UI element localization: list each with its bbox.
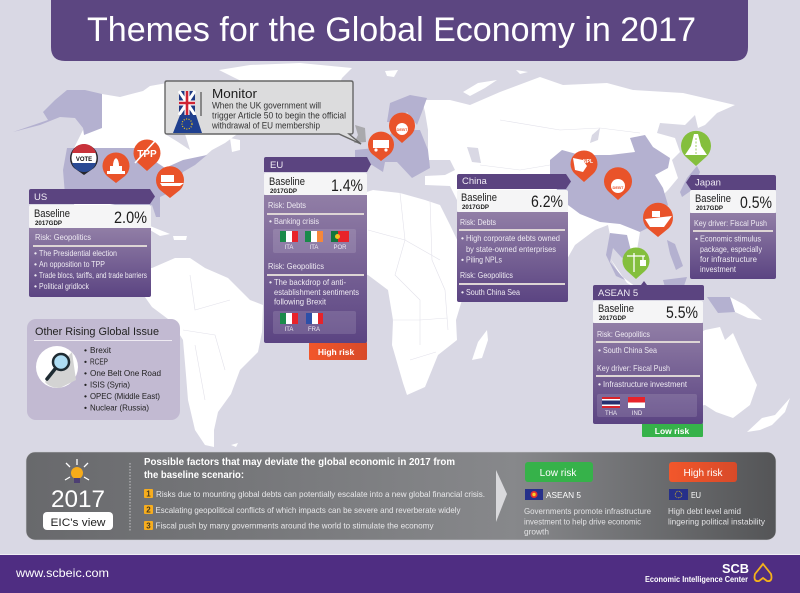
US risks: Risk: Geopolitics	[35, 232, 91, 242]
numbered factors: 2	[146, 506, 151, 514]
Japan key driver: Key driver: Fiscal Push	[694, 218, 767, 228]
title: Themes for the Global Economy in 2017	[87, 11, 696, 49]
panel: EU: establishment sentiments	[274, 287, 359, 297]
icon: magnifying glass	[36, 346, 78, 388]
panel: US: •	[34, 259, 37, 269]
China baseline	[457, 190, 568, 212]
EU risk: geopolitics: Risk: Geopolitics	[268, 261, 324, 271]
panel: US: •	[34, 270, 37, 280]
US header	[29, 189, 155, 204]
panel: EU: 2017GDP	[270, 189, 297, 195]
pin: China debt: DEBT	[613, 185, 624, 190]
flags: THA IND: IND	[632, 411, 643, 417]
flags: ITA ITA POR: ITA	[285, 245, 293, 251]
heading: possible factors: the baseline scenario:	[144, 470, 244, 481]
SCB wordmark: SCB	[722, 561, 749, 576]
pin: NPL	[571, 150, 598, 182]
panel: Japan: Economic stimulus	[700, 234, 761, 244]
EU body	[264, 195, 367, 343]
panel: US: •	[34, 248, 37, 258]
low risk column: ASEAN 5	[546, 490, 581, 500]
issue list	[84, 345, 161, 412]
numbered factors: Fiscal push by many governments around the world to stimulate the economy	[156, 520, 434, 530]
low risk column: Low risk	[540, 468, 577, 479]
issue list: •	[84, 356, 87, 366]
pin: China debt	[604, 167, 632, 200]
panel: Japan: •	[695, 234, 698, 244]
high risk column: High risk	[684, 468, 723, 479]
panel: EU: •	[269, 216, 272, 226]
panel: ASEAN 5: Infrastructure investment	[603, 379, 688, 389]
panel: US: 2017GDP	[35, 221, 62, 227]
pin: TPP crossed out: TPP	[137, 149, 157, 160]
issue list: •	[84, 402, 87, 412]
panel: ASEAN 5: ASEAN 5	[598, 288, 638, 299]
panel: China: •	[461, 233, 464, 243]
panel: Japan: package, especially	[700, 244, 763, 254]
year: 2017	[51, 486, 105, 513]
numbered factors: 3	[146, 522, 151, 530]
flags: THA IND: THA	[605, 411, 617, 417]
high risk column: High debt level amid	[668, 506, 741, 516]
icon: SCB logo	[754, 564, 772, 581]
China risks: Risk: Debts	[460, 217, 496, 227]
footer	[0, 554, 800, 593]
SCB wordmark	[645, 561, 749, 584]
high risk column	[668, 462, 766, 526]
panel: EU: following Brexit	[274, 296, 327, 306]
text: Monitor description: trigger Article 50 to begin the official	[212, 110, 346, 120]
issue list: •	[84, 380, 87, 390]
pin: cargo ship	[156, 166, 184, 198]
numbered factors: Risks due to mounting global debts can potentially escalate into a new global financial crisis.	[156, 489, 485, 499]
ASEAN risks and drivers: Risk: Geopolitics	[597, 329, 650, 339]
panel: US: 2.0%	[114, 208, 147, 227]
panel: Japan: investment	[700, 264, 737, 274]
flags: THA IND	[597, 394, 697, 417]
heading: possible factors	[144, 457, 455, 481]
Japan body	[690, 213, 776, 279]
Japan baseline	[690, 190, 776, 213]
text: Monitor description	[211, 100, 346, 130]
pill: EIC's view	[43, 512, 113, 530]
panel: China: 6.2%	[531, 192, 563, 211]
pin: NPL: NPL	[583, 159, 593, 165]
panel: ASEAN 5: •	[598, 379, 601, 389]
pin: road	[681, 131, 711, 166]
pill: EIC's view: EIC's view	[50, 517, 106, 529]
panel: US: Baseline	[34, 208, 70, 220]
Japan header	[686, 175, 776, 190]
issue list: •	[84, 368, 87, 378]
ASEAN baseline	[593, 301, 703, 323]
panel: China: South China Sea	[466, 287, 520, 297]
panel: EU: Baseline	[269, 176, 305, 188]
issue list: ISIS (Syria)	[90, 380, 130, 390]
panel: EU	[264, 157, 371, 360]
low risk column	[524, 462, 651, 536]
panel: ASEAN 5: 5.5%	[666, 303, 698, 322]
heading: possible factors: Possible factors that may deviate the global economic in 2017 from	[144, 457, 455, 468]
pin: China sea vessel	[643, 203, 673, 237]
arrow	[496, 470, 507, 522]
issue list: One Belt One Road	[90, 368, 161, 378]
panel: US: An opposition to TPP	[39, 259, 105, 269]
panel: US: The Presidential election	[39, 248, 117, 258]
panel: EU: The backdrop of anti-	[274, 277, 346, 287]
EU baseline	[264, 173, 367, 195]
panel: EIC's view	[26, 452, 776, 540]
low risk column: investment to help drive economic	[524, 516, 642, 526]
flags: ITA FRA: FRA	[308, 327, 320, 333]
pin: EU debt	[389, 113, 415, 143]
website: www.scbeic.com	[15, 566, 109, 580]
panel: Other Rising Global Issue	[27, 319, 180, 420]
flags: ITA ITA POR	[273, 229, 356, 253]
panel: ASEAN 5: Baseline	[598, 303, 634, 315]
panel: China: Risk: Geopolitics	[460, 270, 513, 280]
numbered factors	[144, 489, 485, 530]
panel: Japan: Japan	[695, 178, 721, 188]
panel: China: •	[461, 287, 464, 297]
panel: EU: High risk	[318, 347, 354, 357]
pin: construction crane	[623, 247, 650, 279]
pin: EU debt: DEBT	[397, 127, 408, 132]
panel: China: Piling NPLs	[466, 254, 502, 264]
high risk column: lingering political instability	[668, 516, 766, 526]
panel: China: China	[462, 176, 488, 187]
US body	[29, 228, 151, 297]
panel: ASEAN 5: South China Sea	[603, 345, 657, 355]
panel: China: by state-owned enterprises	[466, 244, 556, 254]
panel: US	[29, 189, 155, 297]
panel: China: 2017GDP	[462, 205, 489, 211]
pin: capitol	[102, 152, 129, 183]
panel: ASEAN 5	[593, 281, 704, 437]
numbered factors: 1	[146, 490, 151, 498]
panel: Japan: Baseline	[695, 193, 731, 205]
panel: China: Baseline	[461, 192, 497, 204]
EU header	[264, 157, 371, 172]
panel: China	[457, 174, 571, 302]
Low risk tag	[642, 423, 703, 437]
flags: ITA ITA POR: ITA	[310, 245, 318, 251]
issue list: •	[84, 345, 87, 355]
panel: ASEAN 5: Key driver: Fiscal Push	[597, 363, 670, 373]
issue list: Nuclear (Russia)	[90, 402, 149, 412]
ASEAN body	[593, 323, 703, 424]
ASEAN header	[593, 281, 704, 300]
panel: Japan	[686, 175, 776, 279]
heading: Monitor: Monitor	[212, 86, 258, 101]
icon: UK door and EU carpet	[173, 91, 202, 133]
panel: EU: 1.4%	[331, 176, 363, 195]
panel: EU: Banking crisis	[274, 216, 319, 226]
flags: ITA ITA POR: POR	[333, 245, 347, 251]
flags: ITA FRA	[273, 311, 356, 334]
panel: EU: •	[269, 277, 272, 287]
heading: Other Rising Global Issue	[35, 326, 159, 338]
panel: US: •	[34, 281, 37, 291]
pin: vote: VOTE	[76, 157, 92, 163]
panel: ASEAN 5: Low risk	[655, 426, 690, 436]
panel: ASEAN 5: 2017GDP	[599, 316, 626, 322]
world map	[13, 63, 790, 447]
panel: Japan: 0.5%	[740, 193, 772, 212]
panel: ASEAN 5: •	[598, 345, 601, 355]
panel: China: •	[461, 254, 464, 264]
panel: Japan: for infrastructure	[700, 254, 757, 264]
issue list: Brexit	[90, 345, 112, 355]
panel: China: High corporate debts owned	[466, 233, 560, 243]
issue list: •	[84, 391, 87, 401]
text: Monitor description: withdrawal of EU membership	[211, 120, 320, 130]
title banner	[51, 0, 748, 61]
flags: ITA FRA: ITA	[285, 327, 293, 333]
panel: US: Political gridlock	[39, 281, 90, 291]
callout: Monitor	[165, 81, 361, 144]
panel: EU: EU	[270, 160, 283, 171]
panel: US: Trade blocs, tariffs, and trade barriers	[39, 270, 147, 280]
issue list: OPEC (Middle East)	[90, 391, 160, 401]
High risk tag	[309, 342, 367, 360]
pin: TPP crossed out	[134, 139, 160, 171]
low risk column: growth	[524, 526, 549, 536]
low risk column: Governments promote infrastructure	[524, 506, 651, 516]
China body	[457, 212, 568, 302]
issue list: RCEP	[90, 356, 108, 366]
panel: Japan: 2017GDP	[696, 206, 723, 212]
icon: light bulb	[65, 459, 89, 483]
China header	[457, 174, 571, 189]
pin: vote	[70, 144, 98, 175]
numbered factors: Escalating geopolitical conflicts of which impacts can be severe and reverberate widely	[156, 505, 461, 515]
EU risk: debts: Risk: Debts	[268, 200, 306, 210]
panel: US: US	[34, 192, 47, 203]
US baseline	[29, 205, 151, 228]
SCB wordmark: Economic Intelligence Center	[645, 575, 748, 584]
high risk column: EU	[691, 490, 701, 500]
text: Monitor description: When the UK government will	[212, 100, 321, 110]
pin: train	[368, 132, 394, 161]
